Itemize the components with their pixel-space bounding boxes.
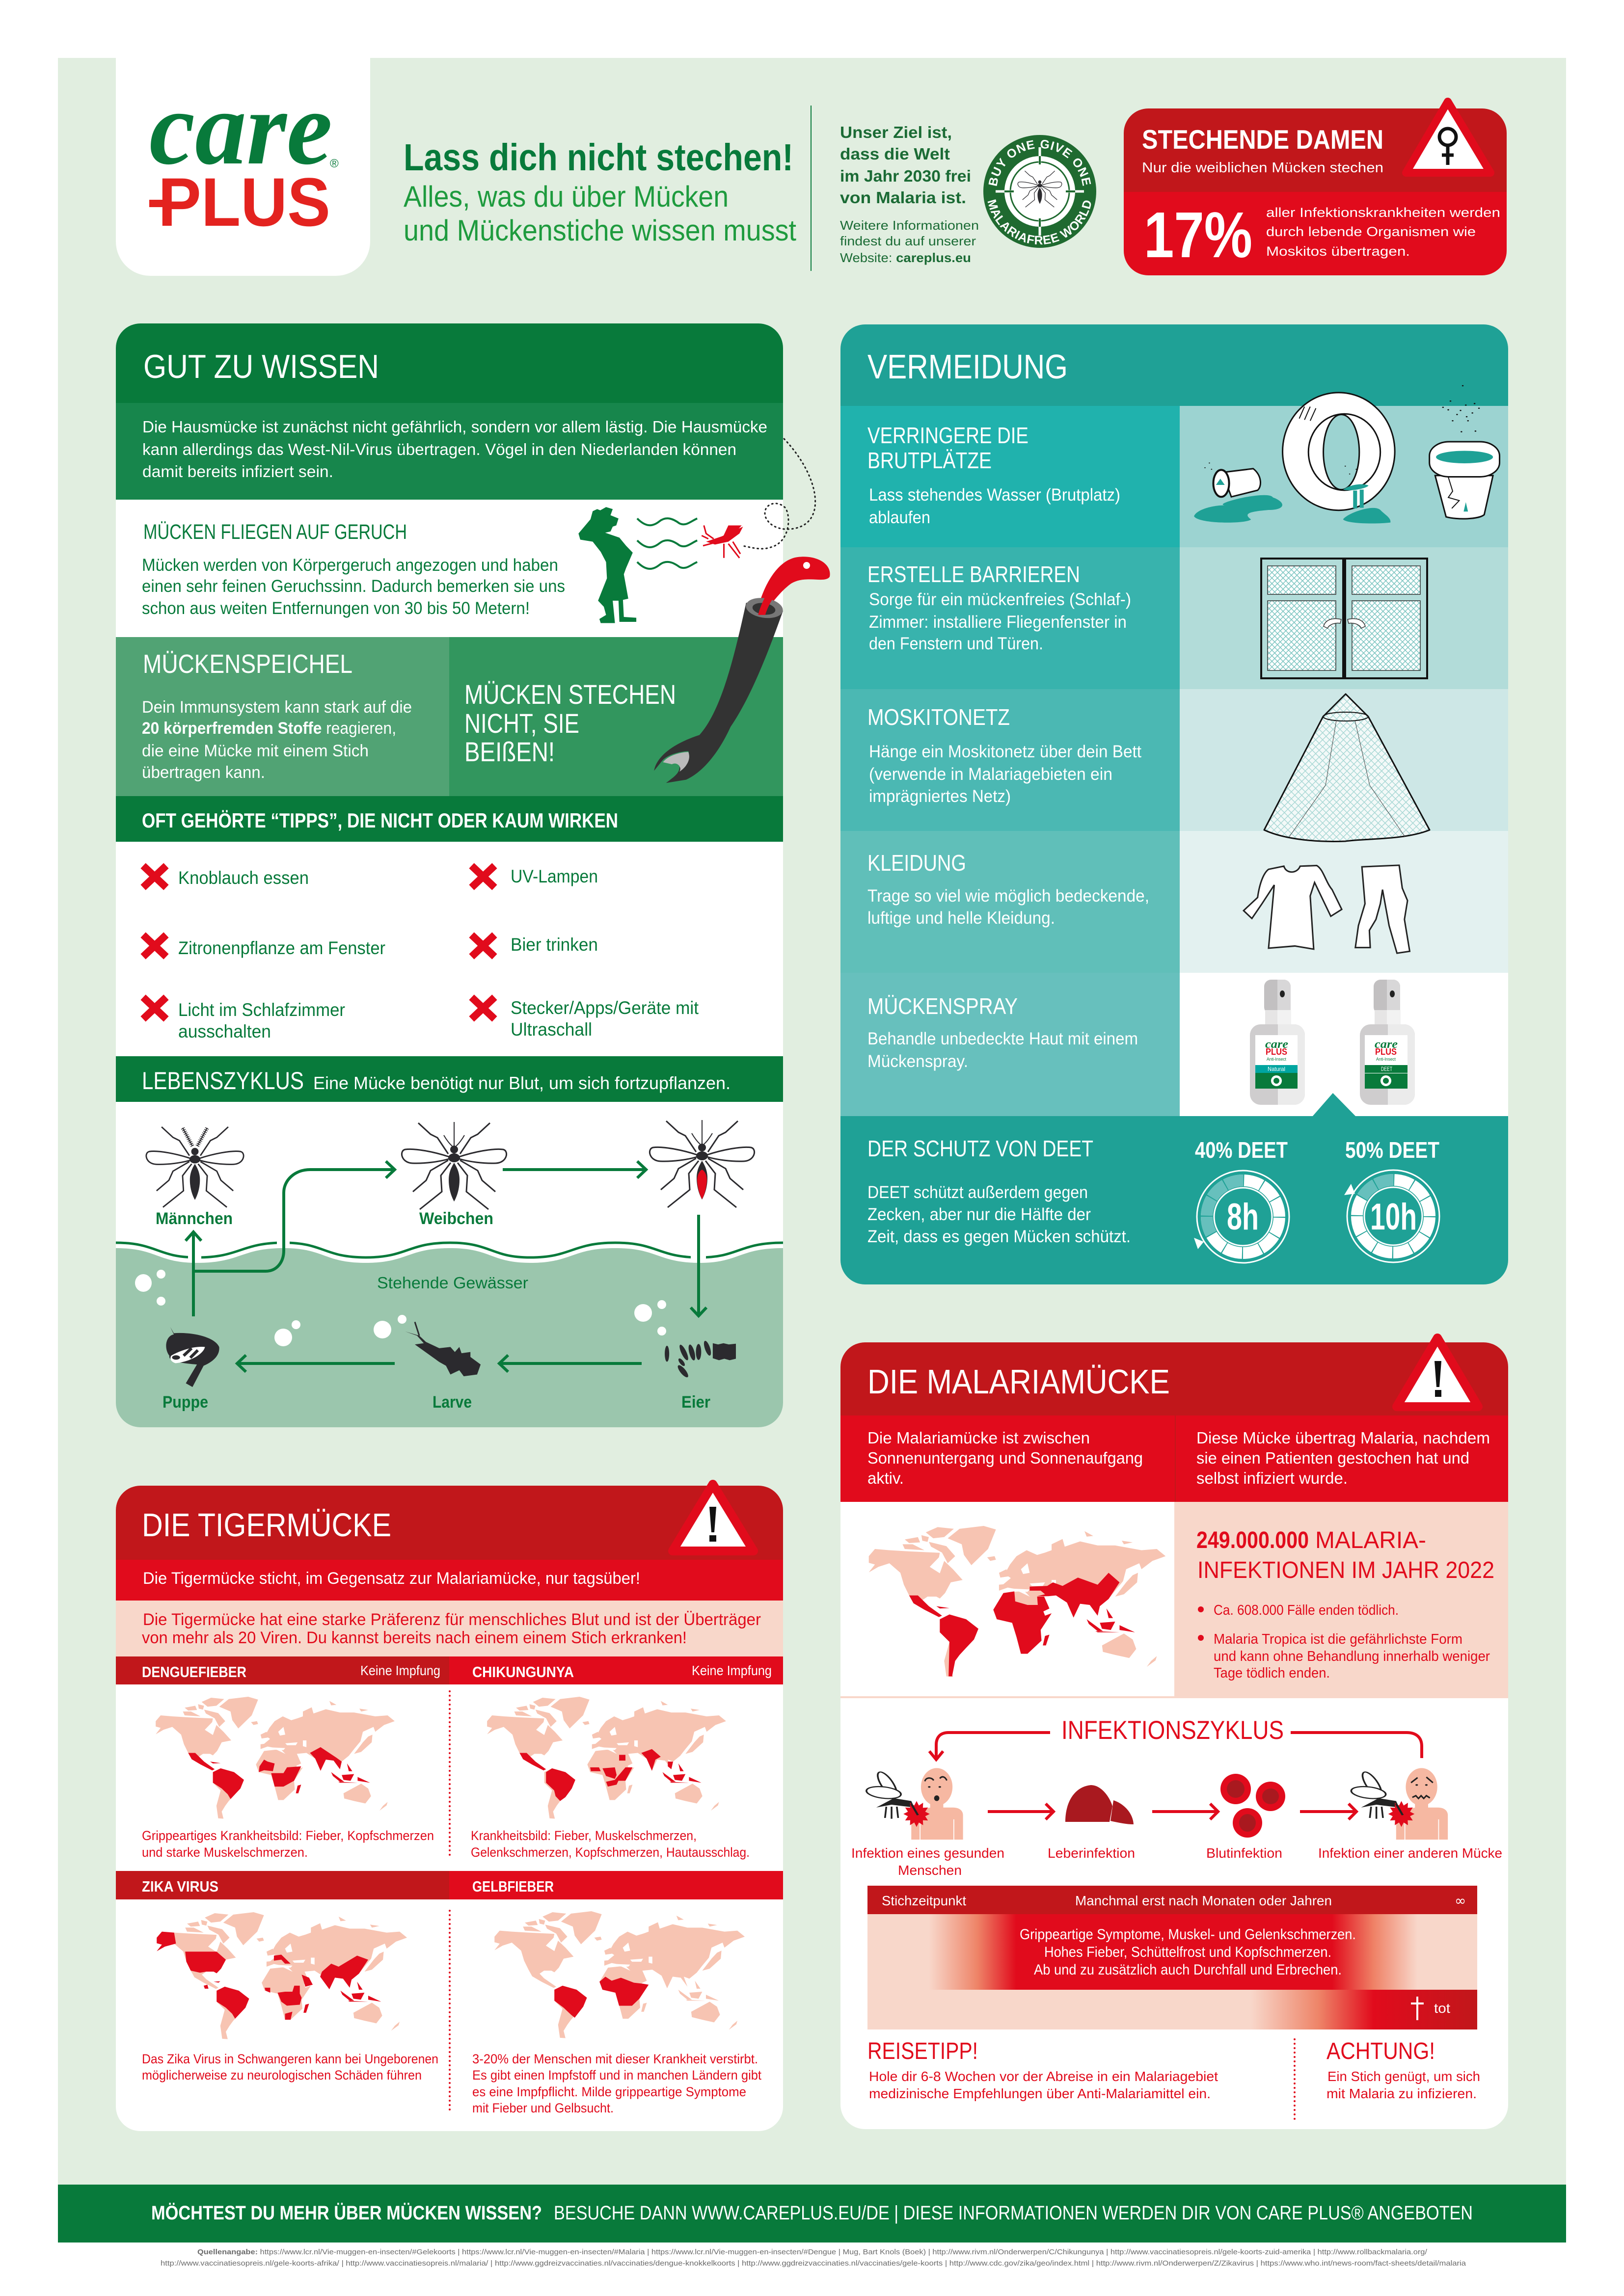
tiger mosquito description: Die Tigermücke hat eine starke Präferenz für menschliches Blut und ist der Überträger bbox=[143, 1610, 761, 1629]
house mosquito text: Die Hausmücke ist zunächst nicht gefährlich, sondern vor allem lästig. Die Hausmücke bbox=[142, 418, 767, 436]
heading tips bbox=[116, 796, 783, 842]
row: brutplaetze: VERRINGERE DIE bbox=[867, 423, 1029, 448]
main title: Lass dich nicht stechen! bbox=[404, 136, 793, 179]
malaria facts: Sonnenuntergang und Sonnenaufgang bbox=[867, 1449, 1143, 1467]
warning note bbox=[1326, 2038, 1480, 2101]
panel: mueckenspeichel: 20 körperfremden Stoffe reagieren, bbox=[142, 719, 396, 738]
logo PLUS wordmark: ® bbox=[330, 157, 339, 170]
icon: red mosquito with dotted flight path bbox=[702, 439, 815, 558]
footer banner: MÖCHTEST DU MEHR ÜBER MÜCKEN WISSEN? bbox=[151, 2202, 542, 2224]
world map: zika bbox=[157, 1912, 407, 2039]
heading tips: OFT GEHÖRTE “TIPPS”, DIE NICHT ODER KAUM WIRKEN bbox=[142, 809, 618, 832]
stat description: durch lebende Organismen wie bbox=[1266, 224, 1476, 239]
icon: warning triangle bbox=[1397, 1338, 1478, 1407]
tiger mosquito description: von mehr als 20 Viren. Du kannst bereits nach einem einem Stich erkranken! bbox=[142, 1629, 687, 1647]
row: brutplaetze: Lass stehendes Wasser (Brutplatz) bbox=[869, 485, 1120, 505]
row: barrieren: ERSTELLE BARRIEREN bbox=[867, 561, 1080, 587]
list: ineffective tips: Ultraschall bbox=[511, 1019, 592, 1040]
deet section text: DER SCHUTZ VON DEET bbox=[867, 1136, 1093, 1161]
dengue description: Grippeartiges Krankheitsbild: Fieber, Kopfschmerzen bbox=[142, 1828, 434, 1843]
panel: malaria infections stat: Tage tödlich enden. bbox=[1214, 1665, 1330, 1681]
clock: 50 percent deet 10h: 50% DEET bbox=[1345, 1137, 1439, 1163]
icon: larva bbox=[405, 1322, 481, 1376]
disease header: dengue: DENGUEFIEBER bbox=[142, 1663, 246, 1681]
icon: spray bottle natural bbox=[1250, 980, 1305, 1105]
panel: mueckenspeichel: Dein Immunsystem kann stark auf die bbox=[142, 698, 412, 717]
panel: malaria infections stat: Malaria Tropica ist die gefährlichste Form bbox=[1214, 1631, 1462, 1647]
gelbfieber description: Es gibt einen Impfstoff und in manchen Ländern gibt bbox=[472, 2068, 761, 2082]
goal statement: von Malaria ist. bbox=[840, 188, 966, 207]
panel: malaria infections stat: INFEKTIONEN IM JAHR 2022 bbox=[1197, 1557, 1494, 1583]
row: moskitonetz bbox=[840, 689, 1508, 831]
chikungunya description bbox=[471, 1828, 750, 1860]
row: moskitonetz: MOSKITONETZ bbox=[867, 704, 1010, 730]
row: brutplaetze: ablaufen bbox=[869, 508, 930, 527]
row: moskitonetz: imprägniertes Netz) bbox=[869, 787, 1011, 806]
dengue description bbox=[142, 1828, 434, 1860]
world map: malaria bbox=[869, 1526, 1165, 1677]
row: kleidung bbox=[840, 831, 1508, 973]
icon: spray bottle natural: Natural bbox=[1268, 1066, 1285, 1072]
label weibchen: Weibchen bbox=[419, 1209, 493, 1228]
deet section text: Zecken, aber nur die Hälfte der bbox=[867, 1205, 1091, 1224]
row: barrieren bbox=[840, 547, 1508, 689]
malaria facts bbox=[840, 1415, 1508, 1502]
timeline: ∞ bbox=[1455, 1893, 1466, 1909]
smell text: einen sehr feinen Geruchssinn. Dadurch bemerken sie uns bbox=[142, 577, 565, 596]
list: ineffective tips: Zitronenpflanze am Fenster bbox=[178, 938, 385, 958]
infection stage labels: Infektion eines gesunden bbox=[851, 1845, 1004, 1861]
panel: muecken beissen: BEIßEN! bbox=[464, 736, 555, 767]
icon: female warning triangle bbox=[1406, 102, 1490, 173]
panel: die malariamuecke bbox=[840, 1338, 1508, 2129]
house mosquito text: damit bereits infiziert sein. bbox=[142, 462, 333, 481]
pointer triangle bbox=[1312, 1093, 1356, 1117]
clock: 40 percent deet 8h: 8h bbox=[1227, 1196, 1259, 1238]
row: moskitonetz: Hänge ein Moskitonetz über dein Bett bbox=[869, 742, 1141, 761]
dengue description: und starke Muskelschmerzen. bbox=[142, 1845, 308, 1860]
disease header: dengue: Keine Impfung bbox=[360, 1663, 440, 1678]
heading malariamuecke: DIE MALARIAMÜCKE bbox=[867, 1362, 1170, 1401]
timeline: Manchmal erst nach Monaten oder Jahren bbox=[1075, 1893, 1332, 1908]
panel: malaria infections stat: MALARIA- bbox=[1315, 1527, 1426, 1553]
row: barrieren: den Fenstern und Türen. bbox=[869, 634, 1043, 653]
row: mueckenspray: MÜCKENSPRAY bbox=[867, 993, 1018, 1019]
house mosquito text: kann allerdings das West-Nil-Virus übertragen. Vögel in den Niederlanden können bbox=[142, 440, 736, 458]
goal statement: Unser Ziel ist, bbox=[840, 123, 952, 141]
sources bbox=[161, 2248, 1466, 2268]
17 percent stat: 17% bbox=[1144, 199, 1252, 271]
zika description: möglicherweise zu neurologischen Schäden führen bbox=[142, 2068, 422, 2082]
heading lebenszyklus bbox=[116, 1056, 783, 1102]
row: barrieren: Sorge für ein mückenfreies (Schlaf-) bbox=[869, 590, 1131, 609]
timeline: Stichzeitpunkt bbox=[882, 1893, 966, 1908]
panel: mueckenspeichel: MÜCKENSPEICHEL bbox=[143, 649, 352, 679]
icon: spray bottle natural: care bbox=[1265, 1038, 1288, 1051]
chikungunya description: Krankheitsbild: Fieber, Muskelschmerzen, bbox=[471, 1828, 697, 1843]
icon: person smelling bbox=[578, 507, 636, 623]
row: kleidung: KLEIDUNG bbox=[867, 850, 966, 876]
icon: spray bottle natural: PLUS bbox=[1266, 1047, 1287, 1057]
smell text bbox=[142, 556, 565, 618]
icon: warning triangle bbox=[673, 1484, 754, 1551]
travel tip: Hole dir 6-8 Wochen vor der Abreise in ein Malariagebiet bbox=[869, 2069, 1218, 2084]
standing water bbox=[116, 1248, 783, 1427]
gelbfieber description bbox=[472, 2052, 761, 2115]
disease header: chikungunya bbox=[449, 1656, 783, 1684]
mosquito female with blood bbox=[650, 1120, 755, 1207]
row: kleidung: luftige und helle Kleidung. bbox=[867, 908, 1055, 928]
warning note: Ein Stich genügt, um sich bbox=[1327, 2069, 1480, 2084]
infection stage labels bbox=[851, 1845, 1502, 1878]
icon: eggs bbox=[665, 1340, 736, 1378]
world map: gelbfieber bbox=[494, 1911, 745, 2038]
sources: Quellenangabe: https://www.lcr.nl/Vie-muggen-en-insecten/#Gelekoorts | https://www.lcr.nl/Vie-muggen-en-insecten/#Malaria | https://www.lcr.nl/Vie-muggen-en-insecten/#Dengue | Mug, Bart Knols (Boek) | http://www.rivm.nl/Onderwerpen/C/Chikungunya | http://www.vaccinatiesopreis.nl/gele-koorts-zuid-amerika | http://www.rollbackmalaria.org/ bbox=[197, 2248, 1428, 2256]
heading lebenszyklus: LEBENSZYKLUS bbox=[142, 1067, 304, 1095]
cycle arrows bbox=[186, 1161, 706, 1372]
goal statement: Weitere Informationen bbox=[840, 218, 979, 233]
goal statement: Website: careplus.eu bbox=[840, 250, 971, 265]
mosquito male bbox=[146, 1127, 244, 1207]
goal statement: im Jahr 2030 frei bbox=[840, 167, 971, 185]
clock: 50 percent deet 10h: 10h bbox=[1370, 1196, 1417, 1238]
icon: spray bottle deet: DEET bbox=[1381, 1066, 1392, 1072]
heading gut zu wissen: GUT ZU WISSEN bbox=[143, 348, 379, 385]
panel: malaria infections stat: und kann ohne Behandlung innerhalb weniger bbox=[1214, 1649, 1490, 1664]
panel: muecken beissen bbox=[449, 637, 783, 796]
mosquito female bbox=[402, 1122, 507, 1209]
main title bbox=[404, 136, 796, 247]
row: barrieren: Zimmer: installiere Fliegenfenster in bbox=[869, 613, 1127, 632]
timeline bbox=[867, 1886, 1477, 2029]
clock: 50 percent deet 10h bbox=[1344, 1137, 1439, 1262]
panel: mueckenspeichel: die eine Mücke mit einem Stich bbox=[142, 742, 369, 760]
list: ineffective tips bbox=[146, 866, 699, 1041]
label maennchen: Männchen bbox=[156, 1209, 233, 1228]
icon: proboscis with red tongue bbox=[654, 557, 830, 783]
deet section text: Zeit, dass es gegen Mücken schützt. bbox=[867, 1227, 1131, 1246]
icon: clothing bbox=[1244, 865, 1409, 953]
list: ineffective tips: Licht im Schlafzimmer bbox=[178, 1000, 345, 1020]
infection stage labels: Infektion einer anderen Mücke bbox=[1318, 1845, 1502, 1861]
row: brutplaetze bbox=[840, 406, 1508, 547]
bubbles bbox=[135, 1270, 666, 1346]
labels pupa larva eggs bbox=[162, 1393, 710, 1412]
heading smell: MÜCKEN FLIEGEN AUF GERUCH bbox=[143, 520, 407, 544]
panel: malaria infections stat: Ca. 608.000 Fälle enden tödlich. bbox=[1214, 1602, 1399, 1618]
icon: spray bottle deet: PLUS bbox=[1375, 1047, 1397, 1057]
logo panel bbox=[116, 58, 370, 276]
list: ineffective tips: ausschalten bbox=[178, 1021, 271, 1041]
deet section text bbox=[867, 1136, 1131, 1246]
footer banner: BESUCHE DANN WWW.CAREPLUS.EU/DE | DIESE INFORMATIONEN WERDEN DIR VON CARE PLUS® ANGEBOTEN bbox=[554, 2202, 1473, 2224]
subheading: Nur die weiblichen Mücken stechen bbox=[1142, 160, 1383, 176]
malaria facts: Die Malariamücke ist zwischen bbox=[867, 1429, 1090, 1447]
disease header: zika bbox=[116, 1871, 449, 1899]
panel: stechende damen bbox=[1124, 102, 1507, 275]
label water: Stehende Gewässer bbox=[377, 1274, 528, 1292]
badge: malaria free world bbox=[983, 135, 1096, 248]
row: moskitonetz: (verwende in Malariagebieten ein bbox=[869, 765, 1112, 784]
travel tip bbox=[867, 2038, 1218, 2101]
sources: http://www.vaccinatiesopreis.nl/gele-koorts-afrika/ | http://www.vaccinatiesopreis.nl/malaria/ | http://www.ggdreizvaccinaties.nl/vaccinaties/dengue-knokkelkoorts | http://www.ggdreizvaccinaties.nl/vaccinaties/gele-koorts | http://www.cdc.gov/zika/geo/index.html | http://www.rivm.nl/Onderwerpen/Z/Zikavirus | https://www.who.int/news-room/fact-sheets/detail/malaria bbox=[161, 2259, 1466, 2268]
malaria facts: selbst infiziert wurde. bbox=[1196, 1469, 1348, 1487]
list: ineffective tips: Bier trinken bbox=[511, 934, 598, 955]
smell text: schon aus weiten Entfernungen von 30 bis 50 Metern! bbox=[142, 599, 530, 618]
disease header: dengue bbox=[116, 1656, 449, 1684]
main title: und Mückenstiche wissen musst bbox=[404, 214, 796, 247]
panel: gut zu wissen bbox=[116, 323, 815, 1427]
icon: breeding sites bbox=[1194, 385, 1500, 523]
labels pupa larva eggs: Eier bbox=[681, 1393, 710, 1412]
panel: vermeidung bbox=[840, 324, 1508, 1284]
stat description: Moskitos übertragen. bbox=[1266, 244, 1410, 259]
icon: person infected bitten bbox=[1350, 1768, 1448, 1840]
badge: malaria free world: BUY ONE GIVE ONE bbox=[989, 140, 1091, 186]
infection cycle arrows bbox=[929, 1733, 1422, 1819]
warning note: mit Malaria zu infizieren. bbox=[1326, 2086, 1477, 2101]
panel: die tigermuecke bbox=[116, 1484, 783, 2131]
timeline: Hohes Fieber, Schüttelfrost und Kopfschmerzen. bbox=[1044, 1944, 1331, 1960]
clock: 40 percent deet 8h: 40% DEET bbox=[1195, 1137, 1288, 1163]
gelbfieber description: 3-20% der Menschen mit dieser Krankheit verstirbt. bbox=[472, 2052, 758, 2066]
gelbfieber description: es eine Impfpflicht. Milde grippeartige Symptome bbox=[472, 2084, 746, 2099]
icon: blood cells bbox=[1220, 1774, 1285, 1838]
heading vermeidung: VERMEIDUNG bbox=[867, 347, 1068, 386]
heading tigermuecke: DIE TIGERMÜCKE bbox=[142, 1507, 391, 1544]
travel tip: medizinische Empfehlungen über Anti-Malariamittel ein. bbox=[869, 2086, 1211, 2101]
icon: scent waves bbox=[637, 518, 697, 569]
panel: muecken beissen: MÜCKEN STECHEN bbox=[464, 679, 676, 710]
row: mueckenspray: Mückenspray. bbox=[867, 1052, 968, 1071]
logo care wordmark: care bbox=[149, 69, 332, 187]
panel: mueckenspeichel bbox=[116, 637, 449, 796]
infection stage labels: Leberinfektion bbox=[1048, 1845, 1135, 1861]
icon: liver bbox=[1065, 1785, 1134, 1824]
clock: 40 percent deet 8h bbox=[1194, 1137, 1289, 1263]
smell text: Mücken werden von Körpergeruch angezogen und haben bbox=[142, 556, 558, 575]
row: mueckenspray bbox=[840, 973, 1508, 1116]
labels pupa larva eggs: Puppe bbox=[162, 1393, 208, 1412]
tiger mosquito strip: Die Tigermücke sticht, im Gegensatz zur Malariamücke, nur tagsüber! bbox=[143, 1569, 640, 1588]
timeline: Grippeartige Symptome, Muskel- und Gelenkschmerzen. bbox=[1020, 1926, 1356, 1943]
timeline: tot bbox=[1434, 2001, 1450, 2016]
disease header: gelbfieber: GELBFIEBER bbox=[472, 1878, 554, 1895]
stat description bbox=[1266, 205, 1500, 259]
logo PLUS wordmark: PLUS bbox=[158, 163, 330, 240]
infection stage labels: Menschen bbox=[898, 1863, 962, 1878]
infection stage labels: Blutinfektion bbox=[1206, 1845, 1282, 1861]
list: ineffective tips: UV-Lampen bbox=[511, 866, 598, 886]
house mosquito text bbox=[142, 418, 767, 481]
timeline: Ab und zu zusätzlich auch Durchfall und Erbrechen. bbox=[1034, 1962, 1342, 1978]
goal statement: findest du auf unserer bbox=[840, 234, 976, 248]
world map: chikungunya bbox=[487, 1697, 726, 1819]
panel: malaria infections stat: 249.000.000 bbox=[1196, 1527, 1309, 1553]
zika description bbox=[142, 2052, 438, 2082]
chikungunya description: Gelenkschmerzen, Kopfschmerzen, Hautausschlag. bbox=[471, 1845, 750, 1860]
labels pupa larva eggs: Larve bbox=[433, 1393, 472, 1412]
row: kleidung: Trage so viel wie möglich bedeckende, bbox=[867, 886, 1149, 906]
deet section text: DEET schützt außerdem gegen bbox=[867, 1183, 1088, 1202]
malaria facts: aktiv. bbox=[867, 1469, 904, 1487]
infection cycle heading: INFEKTIONSZYKLUS bbox=[1061, 1716, 1284, 1745]
disease header: chikungunya: Keine Impfung bbox=[692, 1663, 772, 1678]
icon: pupa bbox=[166, 1327, 219, 1387]
heading stechende damen: STECHENDE DAMEN bbox=[1142, 124, 1383, 155]
travel tip: REISETIPP! bbox=[867, 2038, 978, 2064]
list: ineffective tips: Knoblauch essen bbox=[178, 868, 309, 888]
warning note: ACHTUNG! bbox=[1326, 2038, 1435, 2064]
list: ineffective tips: Stecker/Apps/Geräte mit bbox=[511, 998, 699, 1018]
goal statement: dass die Welt bbox=[840, 145, 950, 163]
row: brutplaetze: BRUTPLÄTZE bbox=[867, 448, 992, 473]
disease header: zika: ZIKA VIRUS bbox=[142, 1878, 218, 1895]
icon: person healthy bitten bbox=[865, 1768, 963, 1840]
malaria facts: Diese Mücke übertrag Malaria, nachdem bbox=[1196, 1429, 1490, 1447]
heading lebenszyklus: Eine Mücke benötigt nur Blut, um sich fortzupflanzen. bbox=[313, 1073, 731, 1093]
row: mueckenspray: Behandle unbedeckte Haut mit einem bbox=[867, 1029, 1138, 1048]
life cycle diagram bbox=[116, 1120, 783, 1427]
panel: muecken beissen: NICHT, SIE bbox=[464, 708, 579, 739]
zika description: Das Zika Virus in Schwangeren kann bei Ungeborenen bbox=[142, 2052, 438, 2066]
stat description: aller Infektionskrankheiten werden bbox=[1266, 205, 1500, 220]
disease header: chikungunya: CHIKUNGUNYA bbox=[472, 1663, 574, 1681]
panel: malaria infections stat bbox=[840, 1502, 1508, 1698]
goal statement bbox=[840, 123, 979, 265]
tiger mosquito description bbox=[116, 1601, 783, 1656]
malaria facts: sie einen Patienten gestochen hat und bbox=[1196, 1449, 1469, 1467]
tiger mosquito strip bbox=[116, 1560, 783, 1601]
gelbfieber description: mit Fieber und Gelbsucht. bbox=[472, 2101, 614, 2115]
icon: spray bottle natural: Anti-Insect bbox=[1267, 1057, 1286, 1062]
world map: dengue bbox=[156, 1697, 395, 1819]
disease header: gelbfieber bbox=[449, 1871, 783, 1899]
panel: mueckenspeichel: übertragen kann. bbox=[142, 763, 265, 782]
badge: malaria free world: MALARIAFREE WORLD bbox=[988, 199, 1091, 244]
icon: spray bottle deet: Anti-Insect bbox=[1376, 1057, 1396, 1062]
icon: spray bottle deet: care bbox=[1375, 1038, 1398, 1051]
main title: Alles, was du über Mücken bbox=[404, 180, 729, 213]
icon: window with screens bbox=[1261, 559, 1427, 678]
icon: spray bottle deet bbox=[1360, 980, 1415, 1105]
icon: mosquito net bbox=[1264, 694, 1430, 841]
footer banner bbox=[58, 2185, 1566, 2243]
